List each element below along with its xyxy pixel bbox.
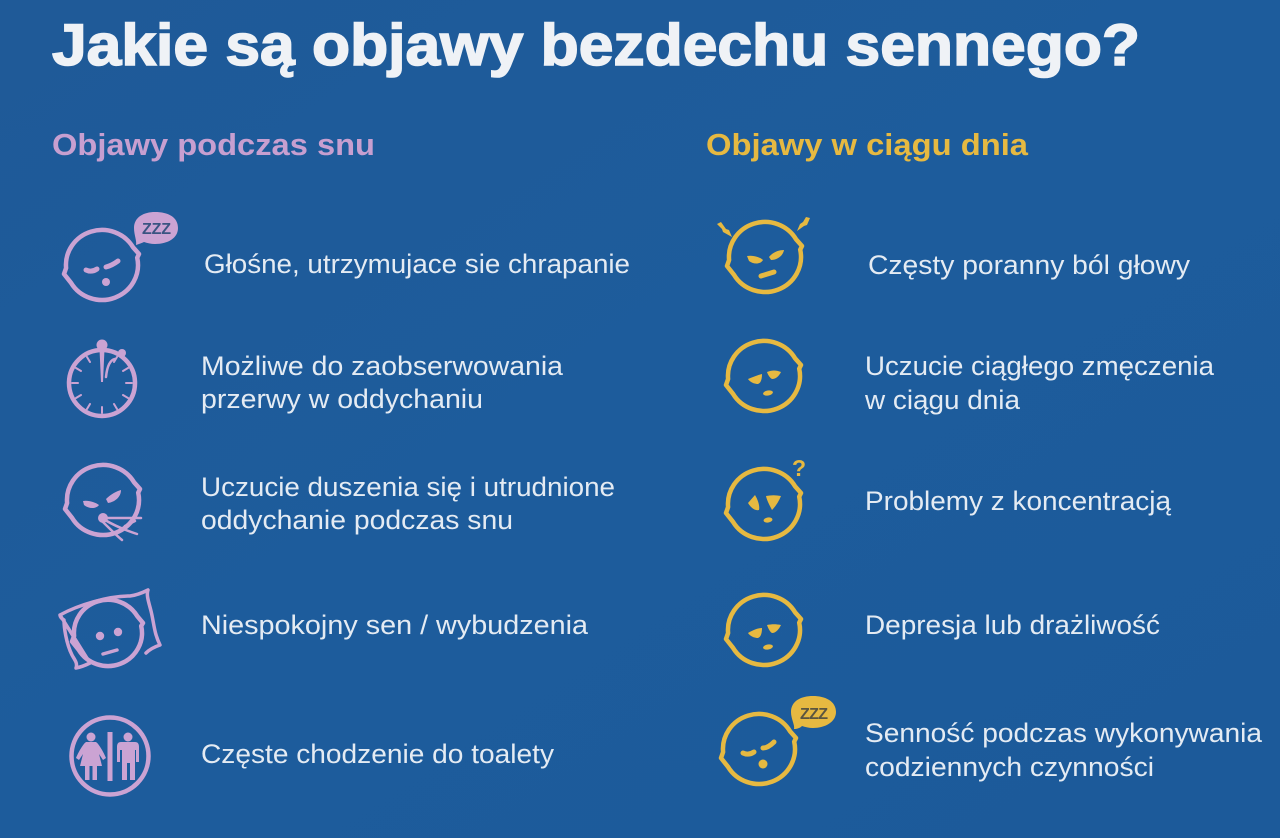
- text: constant tiredness: [864, 351, 1215, 415]
- heading: sleep symptoms: Objawy podczas snu: [52, 127, 375, 162]
- title: Jakie są objawy bezdechu sennego?: [52, 13, 1140, 78]
- icon: sleepy face: ZZZ: [800, 706, 828, 723]
- icon: snoring face: ZZZ: [142, 221, 171, 238]
- icon: confused face: ?: [792, 455, 806, 481]
- icon: toilet sign: [72, 718, 148, 794]
- icon: face on pillow: [60, 590, 160, 668]
- text: daytime sleepiness: [865, 718, 1263, 782]
- text: breathing pauses: Możliwe do zaobserwowania: [201, 351, 564, 381]
- text: snoring: Głośne, utrzymujace sie chrapanie: [204, 249, 630, 279]
- text: choking: oddychanie podczas snu: [201, 505, 513, 535]
- icon: tired face: [726, 341, 801, 411]
- icon: stopwatch: [69, 340, 135, 416]
- text: morning headache: Częsty poranny ból głowy: [868, 250, 1191, 280]
- panel: symptoms during sleep: [52, 127, 630, 794]
- heading: daytime symptoms: Objawy w ciągu dnia: [706, 127, 1029, 162]
- icon: choking face: [65, 465, 141, 540]
- icon: sleepy face: [721, 696, 836, 784]
- text: constant tiredness: w ciągu dnia: [864, 385, 1021, 415]
- text: breathing pauses: przerwy w oddychaniu: [201, 384, 483, 414]
- text: daytime sleepiness: codziennych czynności: [865, 752, 1154, 782]
- text: toilet visits: Częste chodzenie do toalety: [201, 739, 555, 769]
- text: daytime sleepiness: Senność podczas wykonywania: [865, 718, 1263, 748]
- panel: daytime symptoms: [706, 127, 1263, 784]
- text: choking: Uczucie duszenia się i utrudnione: [201, 472, 615, 502]
- icon: snoring face: [64, 212, 178, 300]
- text: depression: Depresja lub drażliwość: [865, 610, 1160, 640]
- icon: depressed face: [726, 595, 801, 665]
- text: concentration problems: Problemy z koncentracją: [865, 486, 1172, 516]
- text: choking: [201, 472, 615, 535]
- text: constant tiredness: Uczucie ciągłego zmęczenia: [865, 351, 1215, 381]
- text: restless sleep: Niespokojny sen / wybudzenia: [201, 610, 589, 640]
- icon: confused face: [726, 455, 806, 539]
- icon: headache face: [717, 217, 810, 292]
- text: breathing pauses: [201, 351, 564, 414]
